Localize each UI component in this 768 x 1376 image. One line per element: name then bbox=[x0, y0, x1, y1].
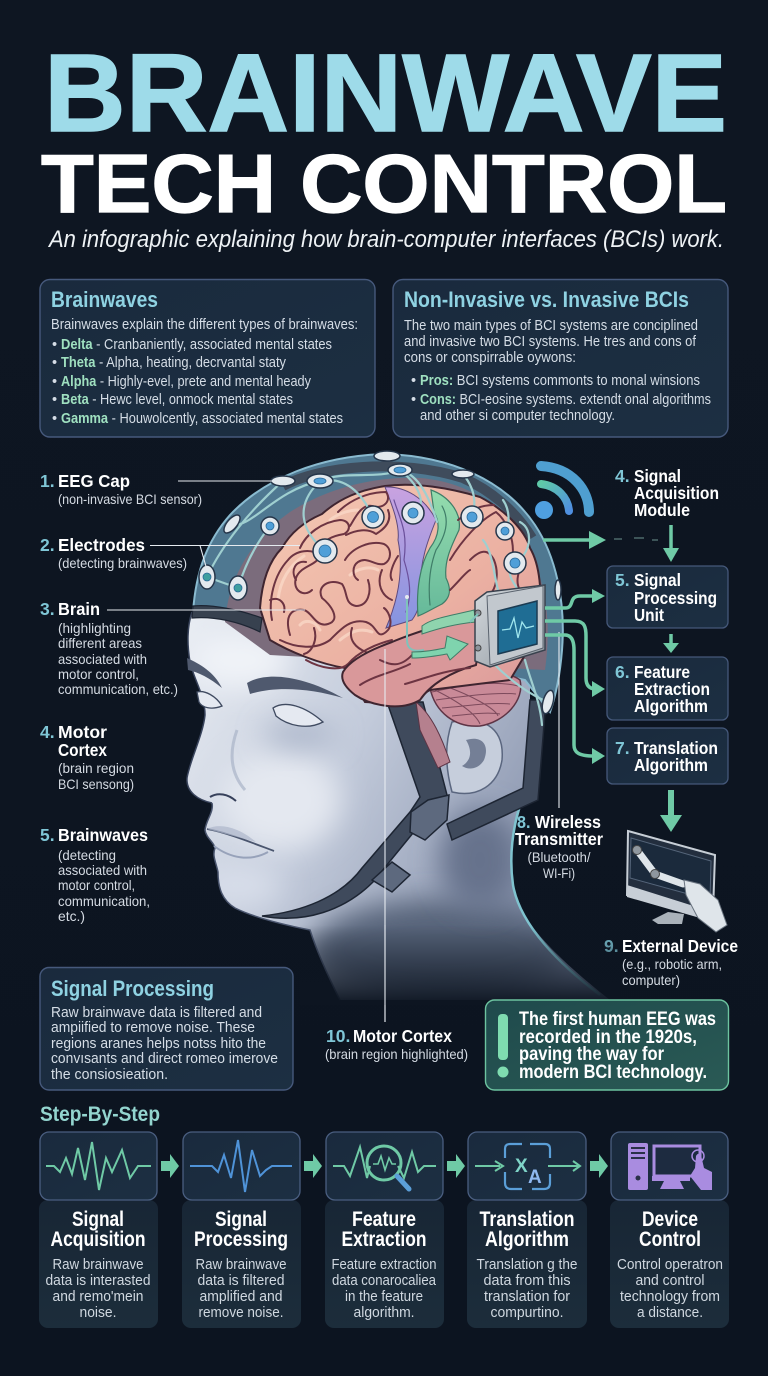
panel: brainwaves: Theta - Alpha, heating, decrvantal staty bbox=[61, 355, 287, 371]
label: 8 wireless transmitter: 8. Wireless bbox=[517, 812, 601, 832]
icon: wifi bbox=[535, 466, 589, 519]
step 1: signal acquisition: data is interasted bbox=[46, 1272, 150, 1289]
panel: non-invasive vs invasive: cons or conspirrable oywons: bbox=[404, 350, 576, 366]
label: 9 external device: 9. bbox=[604, 936, 619, 956]
panel: non-invasive vs invasive: Cons: BCI-eosine systems. extendt onal algorithms bbox=[420, 392, 711, 408]
label: right 4 signal acquisition: Signal bbox=[634, 466, 681, 486]
box: 7 translation algorithm: 7. bbox=[615, 738, 630, 758]
icon: external device monitor and robotic arm bbox=[627, 831, 727, 932]
callout: EEG fact bbox=[486, 1000, 728, 1090]
step 4: translation algorithm: Algorithm bbox=[485, 1228, 569, 1251]
panel: non-invasive vs invasive: Non-Invasive vs. Invasive BCIs bbox=[404, 287, 689, 312]
step 2: signal processing: Raw brainwave bbox=[196, 1256, 286, 1273]
arrows: flow between modules bbox=[543, 525, 682, 832]
step 3: feature extraction: algorithm. bbox=[354, 1304, 414, 1321]
label: 5 brainwaves: communication, bbox=[58, 893, 150, 909]
step 2: signal processing bbox=[182, 1132, 301, 1328]
label: 1 EEG cap: 1. bbox=[40, 471, 55, 491]
label: 3 brain: 3. bbox=[40, 599, 55, 619]
label: 10 motor cortex: 10. bbox=[326, 1026, 350, 1046]
panel: signal processing: regions aranes helps notss hito the bbox=[51, 1036, 266, 1052]
label: 3 brain bbox=[40, 599, 178, 697]
arrow bbox=[161, 1154, 179, 1178]
label: 10 motor cortex: Motor Cortex bbox=[353, 1026, 452, 1046]
label: right 4 signal acquisition: Acquisition bbox=[634, 483, 719, 503]
step 4: translation algorithm: A bbox=[528, 1167, 542, 1188]
step 1: signal acquisition: Raw brainwave bbox=[52, 1256, 144, 1273]
panel: non-invasive vs invasive: The two main types of BCI systems are conciplined bbox=[404, 318, 698, 334]
step 3: feature extraction: Extraction bbox=[342, 1228, 426, 1251]
label: 10 motor cortex bbox=[325, 1026, 468, 1062]
panel: signal processing bbox=[40, 968, 293, 1090]
panel: brainwaves: Beta - Hewc level, onmock mental states bbox=[61, 392, 293, 408]
EEG cap dome bbox=[193, 454, 563, 712]
step 4: translation algorithm bbox=[467, 1132, 587, 1328]
label: 4 motor cortex bbox=[40, 722, 134, 792]
callout: EEG fact: The first human EEG was bbox=[519, 1009, 716, 1030]
box: 7 translation algorithm: Algorithm bbox=[634, 755, 708, 775]
label: 9 external device: External Device bbox=[622, 936, 738, 956]
panel: brainwaves: • bbox=[52, 392, 57, 408]
step 2: signal processing: amplified and bbox=[200, 1288, 282, 1305]
step 1: signal acquisition: noise. bbox=[80, 1304, 116, 1321]
title: TECH CONTROL bbox=[41, 137, 727, 230]
brain folds bbox=[270, 492, 525, 668]
panel: brainwaves: • bbox=[52, 337, 57, 353]
step 4: translation algorithm: translation for bbox=[484, 1288, 570, 1305]
label: 2 electrodes: 2. bbox=[40, 535, 55, 555]
arrow bbox=[304, 1154, 322, 1178]
label: 4 motor cortex: BCI sensong) bbox=[58, 776, 134, 792]
callout: EEG fact: paving the way for bbox=[519, 1044, 665, 1065]
box: 7 translation algorithm: Translation bbox=[634, 738, 718, 758]
wires bbox=[207, 470, 548, 725]
callout: EEG fact: recorded in the 1920s, bbox=[519, 1027, 697, 1048]
label: 8 wireless transmitter: Transmitter bbox=[515, 829, 603, 849]
panel: brainwaves: Gamma - Houwolcently, associated mental states bbox=[61, 411, 343, 427]
cerebellum bbox=[416, 673, 521, 768]
label: 2 electrodes: Electrodes bbox=[58, 535, 145, 555]
box: 6 feature extraction algorithm: Extraction bbox=[634, 679, 710, 699]
step 1: signal acquisition: and remo'mein bbox=[52, 1288, 144, 1305]
label: 5 brainwaves: 5. bbox=[40, 825, 55, 845]
ear bbox=[447, 720, 502, 793]
step 3: feature extraction: in the feature bbox=[345, 1288, 423, 1305]
step 4: translation algorithm: Translation bbox=[480, 1208, 574, 1231]
label: 5 brainwaves: etc.) bbox=[58, 908, 85, 924]
label: 4 motor cortex: Motor bbox=[58, 722, 107, 742]
panel: brainwaves: Brainwaves explain the different types of brainwaves: bbox=[51, 317, 358, 333]
redraw leader over fade bbox=[384, 925, 386, 1022]
step 5: device control: Control operatron bbox=[617, 1256, 723, 1273]
step 5: device control: technology from bbox=[620, 1288, 720, 1305]
label: 1 EEG cap: EEG Cap bbox=[58, 471, 130, 491]
icon: exclamation mark bbox=[498, 1014, 508, 1078]
step 2: signal processing: Processing bbox=[194, 1228, 288, 1251]
step 2: signal processing: remove noise. bbox=[198, 1304, 284, 1321]
purple motor band bbox=[385, 487, 436, 628]
label: right 4 signal acquisition bbox=[615, 466, 719, 520]
label: 4 motor cortex: (brain region bbox=[58, 760, 134, 776]
arrow bbox=[447, 1154, 465, 1178]
label: 5 brainwaves: (detecting bbox=[58, 847, 116, 863]
box: 5 signal processing unit: Processing bbox=[634, 588, 717, 608]
label: 1 EEG cap bbox=[40, 471, 202, 507]
temporal lobe bbox=[342, 610, 480, 706]
label: 5 brainwaves: associated with bbox=[58, 862, 147, 878]
step 2: signal processing: Signal bbox=[215, 1208, 267, 1231]
panel: brainwaves: Alpha - Highly-evel, prete and mental heady bbox=[61, 374, 312, 390]
panel: non-invasive vs invasive: • bbox=[411, 392, 416, 408]
step 5: device control: Device bbox=[642, 1208, 698, 1231]
label: 9 external device: (e.g., robotic arm, bbox=[622, 956, 722, 972]
label: 3 brain: Brain bbox=[58, 599, 100, 619]
title bbox=[41, 32, 727, 230]
step 5: device control: Control bbox=[639, 1228, 701, 1251]
step 4: translation algorithm: data from this bbox=[484, 1272, 570, 1289]
title: BRAINWAVE bbox=[44, 32, 727, 155]
panel: brainwaves: • bbox=[52, 374, 57, 390]
box: 5 signal processing unit: Signal bbox=[634, 570, 681, 590]
green sensory band bbox=[418, 490, 459, 616]
label: 3 brain: different areas bbox=[58, 635, 142, 651]
arrow bbox=[590, 1154, 608, 1178]
step 5: device control: a distance. bbox=[637, 1304, 703, 1321]
heading: step-by-step: Step-By-Step bbox=[40, 1103, 160, 1126]
label: right 4 signal acquisition: Module bbox=[634, 500, 690, 520]
step 1: signal acquisition: Signal bbox=[72, 1208, 124, 1231]
panel: non-invasive vs invasive: • bbox=[411, 373, 416, 389]
electrodes bbox=[199, 451, 561, 715]
panel: signal processing: Signal Processing bbox=[51, 976, 214, 1001]
icon: signal device on the head bbox=[475, 585, 545, 667]
label: 10 motor cortex: (brain region highlighted) bbox=[325, 1046, 468, 1062]
box: 6 feature extraction algorithm bbox=[607, 657, 728, 720]
label: 9 external device: computer) bbox=[622, 972, 680, 988]
panel: brainwaves: • bbox=[52, 411, 57, 427]
panel: signal processing: convısants and direct romeo imerove bbox=[51, 1051, 278, 1067]
leader lines bbox=[107, 481, 559, 1022]
step 3: feature extraction bbox=[325, 1132, 444, 1328]
label: right 4 signal acquisition: 4. bbox=[615, 466, 630, 486]
box: 7 translation algorithm bbox=[607, 728, 728, 784]
step 3: feature extraction: data conarocaliea bbox=[332, 1272, 437, 1289]
label: 9 external device bbox=[604, 936, 738, 988]
label: 8 wireless transmitter: WI-Fi) bbox=[543, 865, 575, 881]
panel: non-invasive vs invasive bbox=[393, 280, 728, 437]
label: 3 brain: motor control, bbox=[58, 666, 139, 682]
step 4: translation algorithm: compurtino. bbox=[490, 1304, 564, 1321]
label: 1 EEG cap: (non-invasive BCI sensor) bbox=[58, 491, 202, 507]
step 4: translation algorithm: Translation g the bbox=[476, 1256, 578, 1273]
panel: signal processing: ampiified to remove noise. These bbox=[51, 1020, 255, 1036]
illustration: head with EEG cap and brain bbox=[187, 451, 610, 1000]
step 1: signal acquisition: Acquisition bbox=[50, 1228, 146, 1251]
arrow: brain to device bbox=[405, 595, 478, 660]
step 1: signal acquisition bbox=[39, 1132, 158, 1328]
step 4: translation algorithm: X bbox=[515, 1156, 528, 1177]
step 3: feature extraction: Feature bbox=[352, 1208, 416, 1231]
panel: brainwaves bbox=[40, 280, 375, 437]
brain main bbox=[260, 485, 541, 704]
neck fade bbox=[300, 925, 620, 1005]
step 5: device control: and control bbox=[636, 1272, 704, 1289]
subtitle: An infographic explaining how brain-computer interfaces (BCIs) work. bbox=[47, 226, 724, 253]
cap front band bbox=[192, 606, 262, 632]
label: 5 brainwaves: Brainwaves bbox=[58, 825, 148, 845]
box: 5 signal processing unit: Unit bbox=[634, 605, 664, 625]
panel: signal processing: the consiosieation. bbox=[51, 1067, 168, 1083]
label: 2 electrodes bbox=[40, 535, 187, 571]
facial features bbox=[187, 658, 343, 858]
label: 3 brain: communication, etc.) bbox=[58, 681, 178, 697]
panel: non-invasive vs invasive: and invasive two BCI systems. He tres and cons of bbox=[404, 334, 697, 350]
chin strap bbox=[262, 700, 546, 918]
face and neck bbox=[187, 610, 610, 1000]
label: 5 brainwaves bbox=[40, 825, 150, 924]
label: 2 electrodes: (detecting brainwaves) bbox=[58, 555, 187, 571]
panel: brainwaves: • bbox=[52, 355, 57, 371]
label: 8 wireless transmitter: (Bluetooth/ bbox=[528, 849, 591, 865]
box: 5 signal processing unit bbox=[607, 566, 728, 628]
callout: EEG fact: modern BCI technology. bbox=[519, 1062, 707, 1083]
label: 5 brainwaves: motor control, bbox=[58, 877, 135, 893]
panel: signal processing: Raw brainwave data is filtered and bbox=[51, 1005, 262, 1021]
panel: non-invasive vs invasive: and other si computer technology. bbox=[420, 408, 615, 424]
panel: brainwaves: Delta - Cranbaniently, associated mental states bbox=[61, 337, 332, 353]
box: 6 feature extraction algorithm: Feature bbox=[634, 662, 690, 682]
box: 5 signal processing unit: 5. bbox=[615, 570, 630, 590]
box: 6 feature extraction algorithm: 6. bbox=[615, 662, 630, 682]
label: 4 motor cortex: Cortex bbox=[58, 740, 107, 760]
label: 3 brain: associated with bbox=[58, 651, 147, 667]
label: 3 brain: (highlighting bbox=[58, 620, 131, 636]
panel: brainwaves: Brainwaves bbox=[51, 287, 158, 312]
step 5: device control bbox=[610, 1132, 729, 1328]
label: 8 wireless transmitter bbox=[515, 812, 603, 881]
label: 4 motor cortex: 4. bbox=[40, 722, 55, 742]
panel: non-invasive vs invasive: Pros: BCI systems commonts to monal winsions bbox=[420, 373, 700, 389]
box: 6 feature extraction algorithm: Algorithm bbox=[634, 696, 708, 716]
step 2: signal processing: data is filtered bbox=[198, 1272, 284, 1289]
step 3: feature extraction: Feature extraction bbox=[332, 1256, 436, 1273]
